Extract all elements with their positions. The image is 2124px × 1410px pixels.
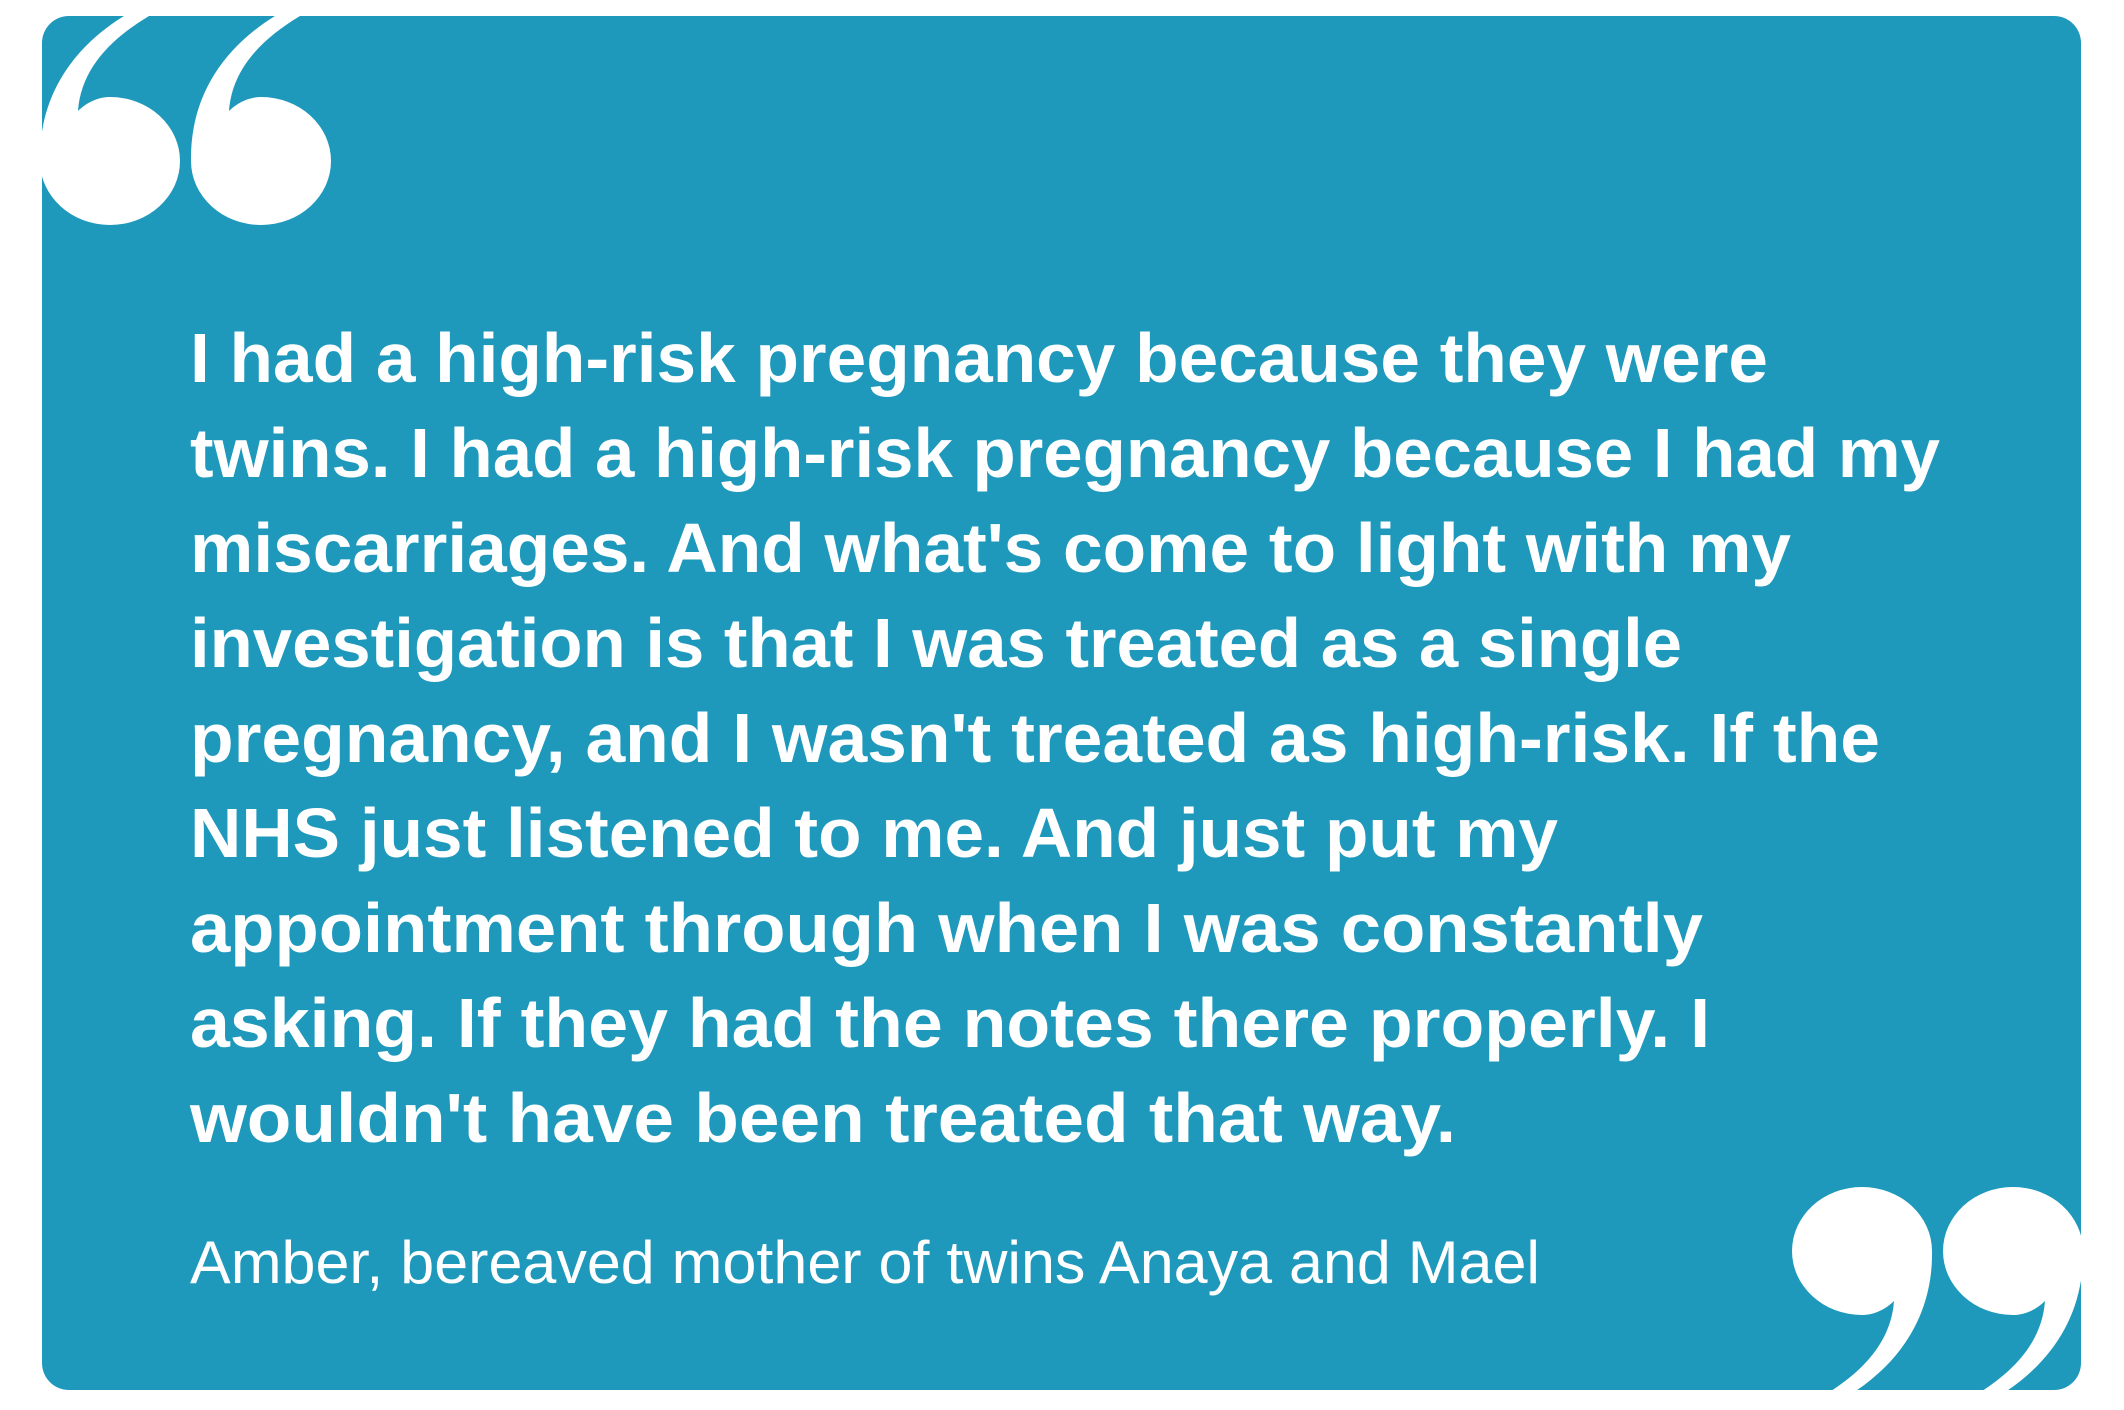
quote text: wouldn't have been treated that way. bbox=[189, 1079, 1456, 1157]
quote text: I had a high-risk pregnancy because they were bbox=[190, 319, 1768, 397]
quote text: twins. I had a high-risk pregnancy because I had my bbox=[190, 414, 1940, 492]
quote text: appointment through when I was constantly bbox=[190, 889, 1703, 967]
quote text bbox=[189, 319, 1940, 1157]
quote text: pregnancy, and I wasn't treated as high-risk. If the bbox=[190, 699, 1880, 777]
quote text: NHS just listened to me. And just put my bbox=[190, 794, 1558, 872]
quote text: investigation is that I was treated as a single bbox=[190, 604, 1682, 682]
icon: closing quote marks bbox=[1792, 1187, 2083, 1396]
quote text: asking. If they had the notes there properly. I bbox=[190, 984, 1710, 1062]
attribution: Amber, bereaved mother of twins Anaya and Mael bbox=[190, 1229, 1540, 1296]
quote text: miscarriages. And what's come to light with my bbox=[190, 509, 1791, 587]
icon: opening quote marks bbox=[40, 16, 331, 225]
